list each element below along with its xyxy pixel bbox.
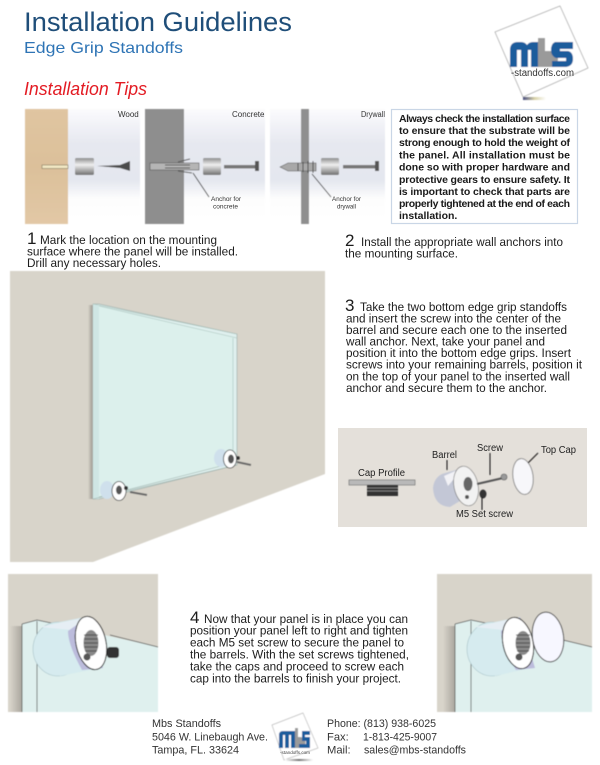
footer: address — [152, 718, 268, 756]
step 2 text: Install the appropriate wall anchors into — [361, 235, 563, 249]
callout: surface warning: done so with proper hardware and — [399, 162, 570, 174]
step 4 text: cap into the barrels to finish your project. — [190, 671, 401, 685]
footer: contact details — [327, 718, 466, 756]
callout: surface warning: is important to check that parts are — [399, 186, 570, 198]
part label: M5 set screw: M5 Set screw — [456, 509, 514, 520]
step 3 text: and insert the screw into the center of the — [346, 312, 561, 326]
footer: address: 5046 W. Linebaugh Ave. — [152, 732, 268, 744]
title: Installation Guidelines — [24, 7, 292, 37]
step 4 text: 4 — [190, 608, 199, 627]
step 4 text: take the caps and proceed to screw each — [190, 660, 404, 674]
illustration: barrel detail with cap — [437, 574, 592, 712]
callout: surface warning: to ensure that the substrate will be — [399, 125, 570, 137]
callout: surface warning: protective gears to ensure safety. It — [399, 174, 570, 186]
footer: contact details: 1-813-425-9007 — [363, 732, 437, 744]
footer: contact details: sales@mbs-standoffs — [364, 744, 466, 756]
step 1 text — [27, 229, 238, 270]
step 2 text: the mounting surface. — [345, 246, 458, 260]
footer: address: Mbs Standoffs — [152, 718, 221, 730]
footer: small logo — [272, 713, 318, 761]
step 1 text: Mark the location on the mounting — [40, 233, 217, 247]
footer: contact details: Phone: (813) 938-6025 — [327, 718, 436, 730]
illustration: barrel detail without cap — [8, 574, 158, 712]
footer: contact details: Mail: — [327, 744, 351, 756]
footer: contact details: Fax: — [327, 732, 349, 744]
callout: surface warning — [392, 110, 578, 224]
callout: surface warning: properly tightened at the end of each — [399, 198, 570, 210]
callout: surface warning: the panel. All installation must be — [399, 149, 570, 161]
step 3 text: on the top of your panel to the inserted wall — [346, 369, 570, 383]
step 3 text: anchor and secure them to the anchor. — [346, 381, 547, 395]
step 3 text: barrel and secure each one to the inserted — [346, 323, 567, 337]
step 4 text: Now that your panel is in place you can — [204, 612, 408, 626]
diagram: wood installation: Wood — [118, 110, 139, 119]
footer: address: Tampa, FL. 33624 — [152, 744, 239, 756]
diagram: drywall installation: Anchor for — [332, 196, 362, 203]
diagram: drywall installation: Drywall — [361, 110, 385, 119]
step 1 text: surface where the panel will be installed. — [27, 244, 238, 258]
step 3 text: 3 — [345, 296, 354, 315]
step 4 text: the barrels. With the set screws tightened, — [190, 648, 409, 662]
diagram: concrete installation: Anchor for — [211, 196, 242, 203]
diagram: concrete installation — [145, 109, 265, 224]
illustration: panel mounted on wall — [10, 271, 325, 562]
step 3 text: position it into the bottom edge grips. Insert — [346, 346, 572, 360]
step 3 text: wall anchor. Next, take your panel and — [345, 334, 545, 348]
diagram: standoff parts — [338, 428, 587, 527]
step 3 text: Take the two bottom edge grip standoffs — [360, 300, 567, 314]
logo: mbs standoffs — [495, 6, 588, 100]
step 1 text: Drill any necessary holes. — [27, 256, 161, 270]
step 2 text — [345, 231, 563, 260]
callout: surface warning: installation. — [399, 210, 457, 222]
diagram: concrete installation: concrete — [213, 204, 238, 210]
step 4 text — [190, 608, 409, 685]
callout: surface warning: strong enough to hold the weight of — [399, 137, 570, 149]
step 3 text — [345, 296, 583, 395]
diagram: drywall installation: drywall — [337, 204, 356, 210]
part label: barrel: Barrel — [432, 450, 457, 461]
heading: installation tips: Installation Tips — [24, 78, 147, 99]
step 2 text: 2 — [345, 231, 354, 250]
footer: small logo: -standoffs.com — [280, 750, 310, 755]
step 4 text: each M5 set screw to secure the panel to — [190, 636, 404, 650]
step 1 text: 1 — [27, 229, 36, 248]
part label: cap profile: Cap Profile — [358, 468, 405, 479]
step 4 text: position your panel left to right and tighten — [190, 624, 408, 638]
callout: surface warning: Always check the installation surface — [399, 113, 570, 125]
logo: mbs standoffs: -standoffs.com — [511, 68, 574, 79]
diagram: concrete installation: Concrete — [232, 110, 265, 119]
subtitle: Edge Grip Standoffs — [24, 40, 183, 57]
part label: top cap: Top Cap — [541, 445, 576, 456]
step 3 text: screws into your remaining barrels, position it — [346, 358, 583, 372]
part label: screw: Screw — [477, 443, 504, 454]
diagram: wood installation — [25, 109, 140, 224]
diagram: drywall installation — [270, 109, 385, 224]
